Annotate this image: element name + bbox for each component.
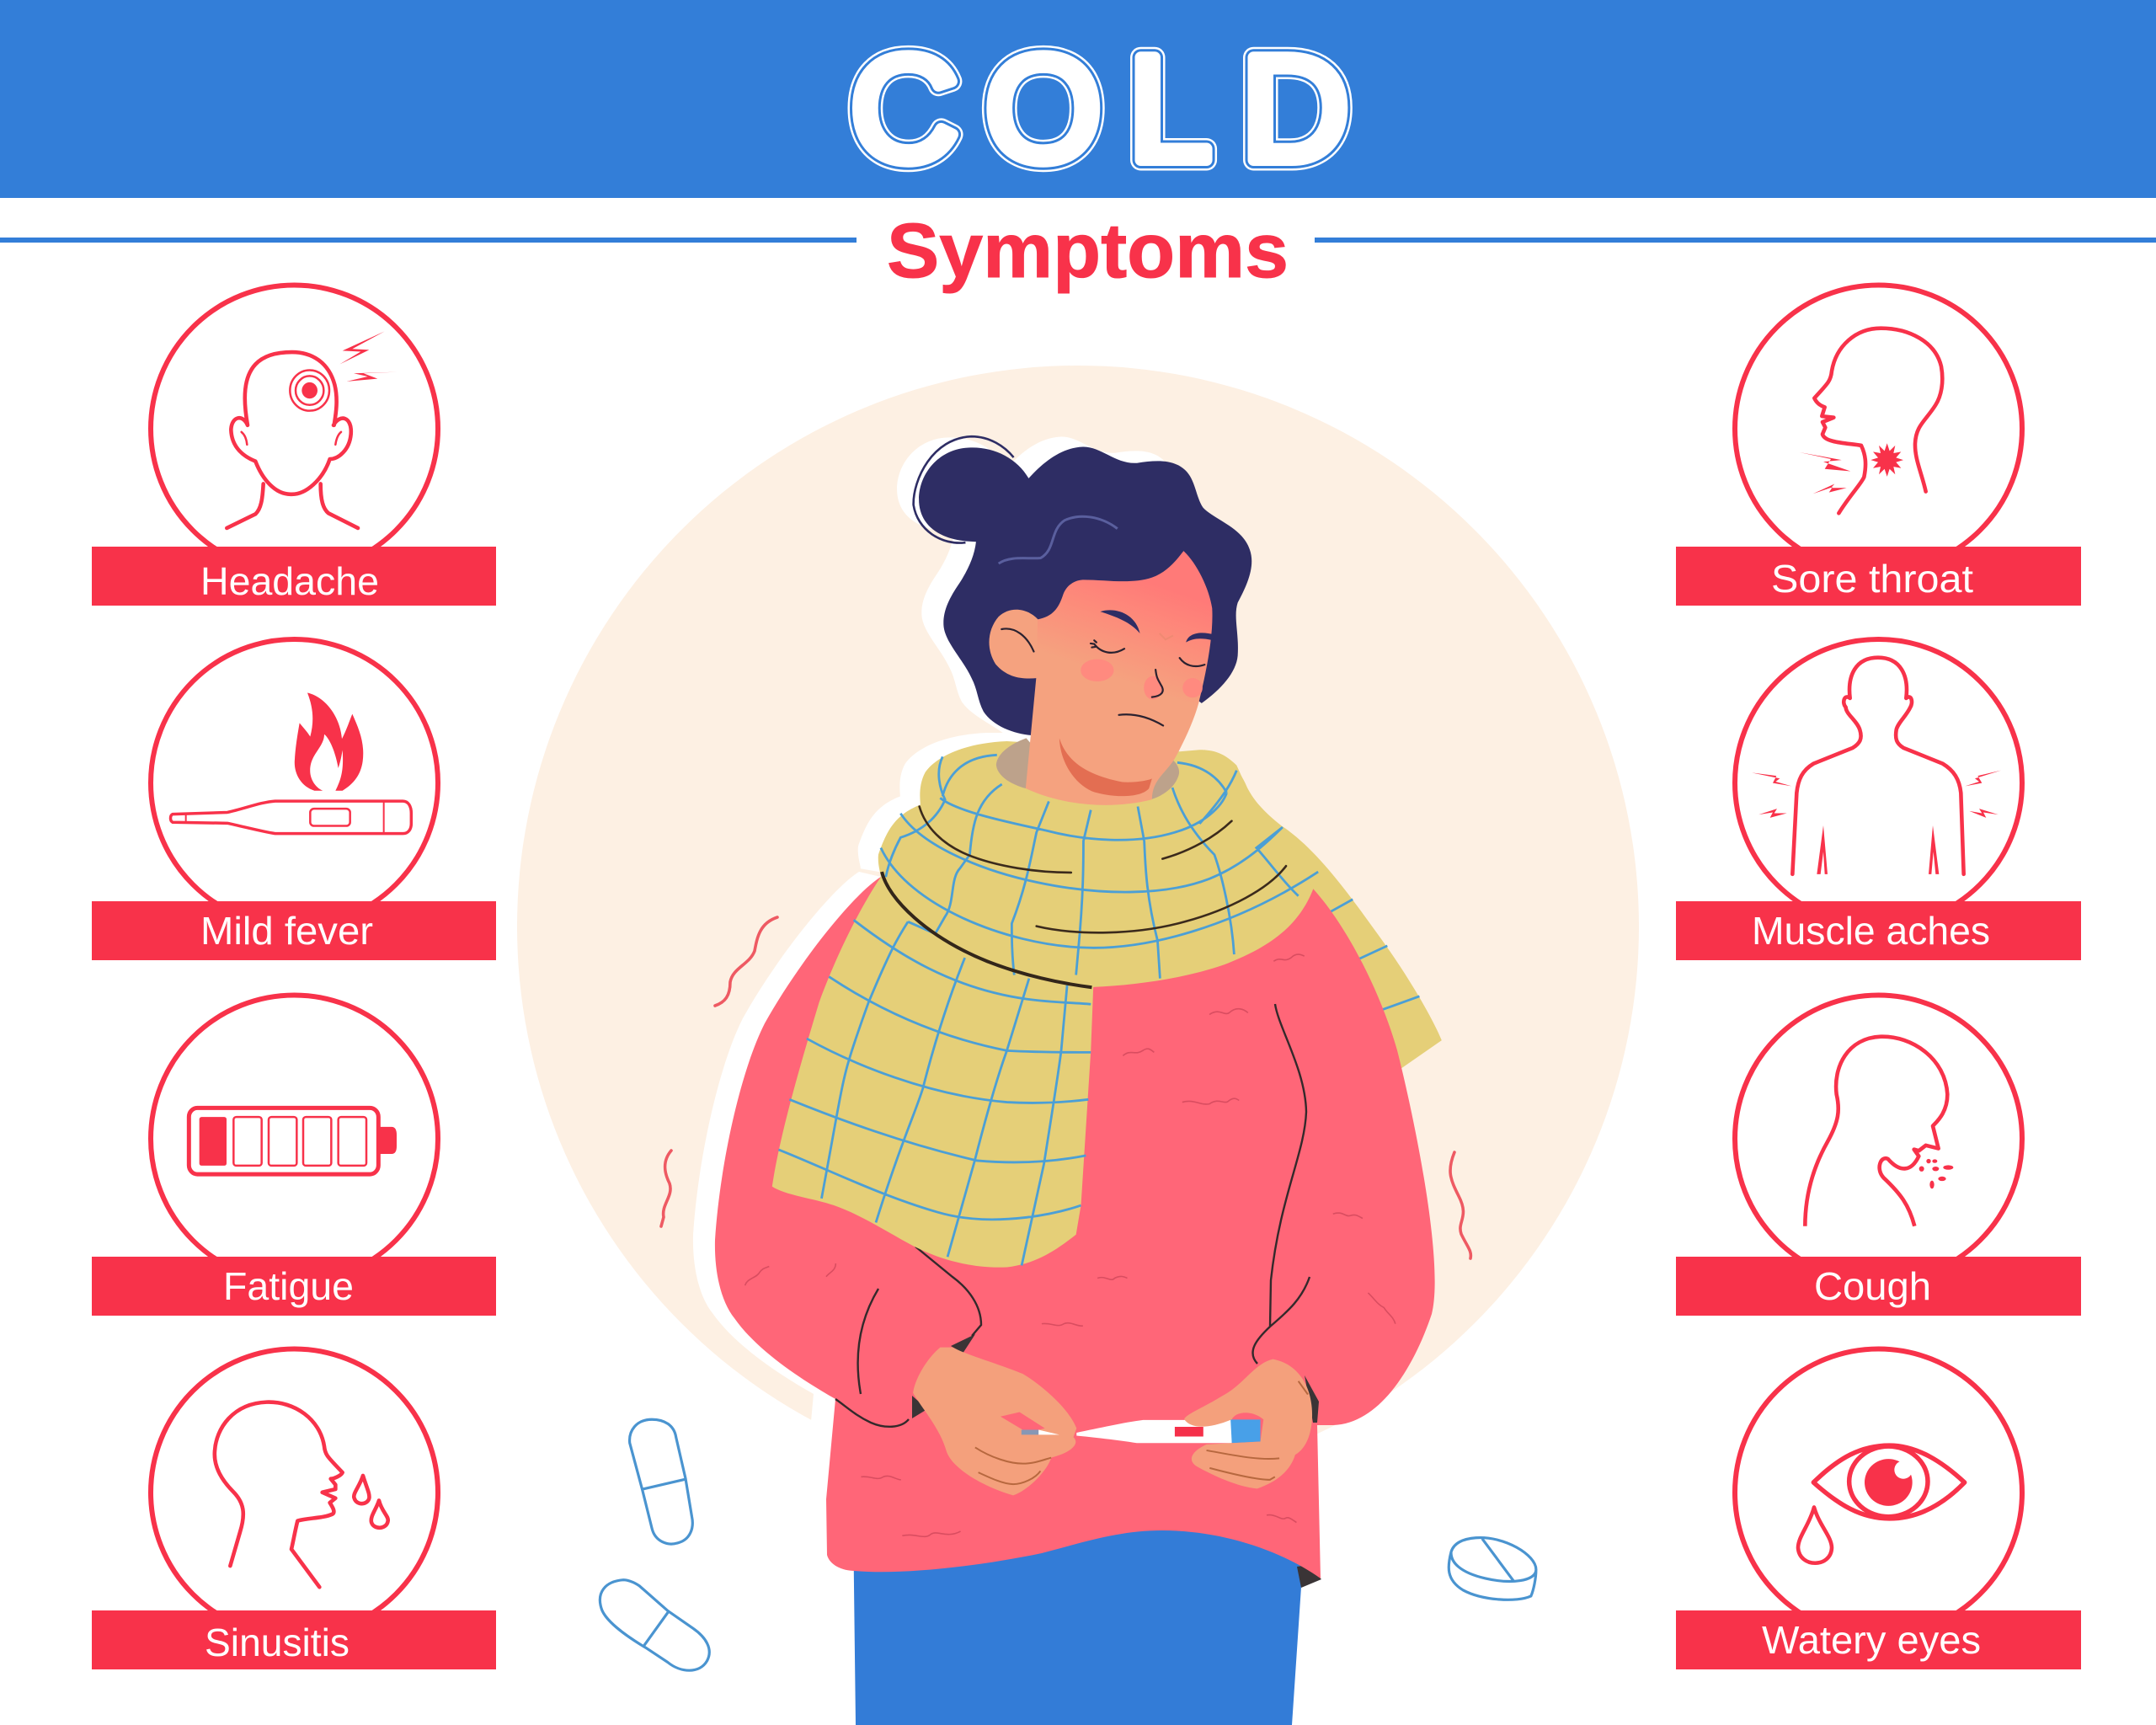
capsule upper [630,1419,692,1544]
circle [1735,285,2022,573]
icon: upper body with aches [1752,658,2001,874]
label bar [1676,1610,2081,1669]
label bar [92,1257,496,1316]
heading rule left [0,238,857,243]
sweater [715,877,1435,1578]
circle [1735,1349,2022,1636]
label: Mild fever [200,909,373,953]
face and neck [990,551,1214,805]
title: COLD: COLD [851,25,1349,192]
label bar [92,547,496,606]
circle [151,285,438,573]
circle [1735,639,2022,927]
label: Watery eyes [1762,1618,1981,1662]
circle [151,639,438,927]
circle [151,996,438,1282]
panel: Sore throat [1676,285,2081,606]
heading: Symptoms: Symptoms [887,208,1289,294]
trousers [853,1516,1314,1725]
label: Sinusitis [205,1621,350,1664]
title: COLD: COLD [851,25,1349,192]
capsule lower [600,1580,709,1670]
eyebrows [1100,610,1214,643]
circle [1735,996,2022,1282]
background circle [517,366,1639,1487]
label bar [1676,901,2081,960]
hands and thermometer [913,1348,1312,1495]
label bar [1676,1257,2081,1316]
panel: Muscle aches [1676,639,2081,960]
icon: throat pain [1800,328,1942,513]
sweater texture tufts [745,954,1396,1536]
left hand [913,1348,1076,1495]
panel: Fatigue [92,996,496,1316]
face shape [1026,551,1213,805]
label bar [1676,547,2081,606]
thermometer [1038,1420,1232,1443]
facial lines [1001,628,1204,725]
title: COLD: COLD [851,25,1349,192]
header band [0,0,2156,198]
label: Sore throat [1771,557,1973,601]
panel: Mild fever [92,639,496,960]
icon: coughing profile [1805,1037,1953,1226]
label: Muscle aches [1752,909,1990,953]
panel: Sinusitis [92,1349,496,1669]
white sticker outline [693,436,1230,1566]
icon: low battery [189,1108,397,1174]
heading rule right [1315,238,2156,243]
shiver marks [661,917,1470,1258]
icon: eye with tear [1798,1445,1965,1563]
scarf front [772,741,1318,1268]
label: Headache [200,559,379,603]
icon: aching head [227,331,398,528]
dark hem [1297,1565,1321,1588]
ear [990,610,1039,679]
right hand [1184,1359,1312,1488]
hair [914,436,1251,735]
circle [151,1349,438,1636]
panel: Headache [92,285,496,606]
label bar [92,1610,496,1669]
chin shadow [1059,738,1152,796]
label bar [92,901,496,960]
icon: head profile with drops [215,1402,388,1587]
pills [600,1419,1536,1670]
label: Fatigue [223,1264,354,1308]
label: Cough [1814,1264,1931,1308]
scarf tail [1204,750,1442,1070]
sweater folds and cuffs [835,1004,1319,1427]
cheeks [1081,659,1113,681]
collar [996,738,1179,799]
panel: Cough [1676,996,2081,1316]
woman figure [661,436,1470,1725]
icon: thermometer and flame [170,692,411,834]
tablet [1449,1538,1536,1599]
panel: Watery eyes [1676,1349,2081,1669]
